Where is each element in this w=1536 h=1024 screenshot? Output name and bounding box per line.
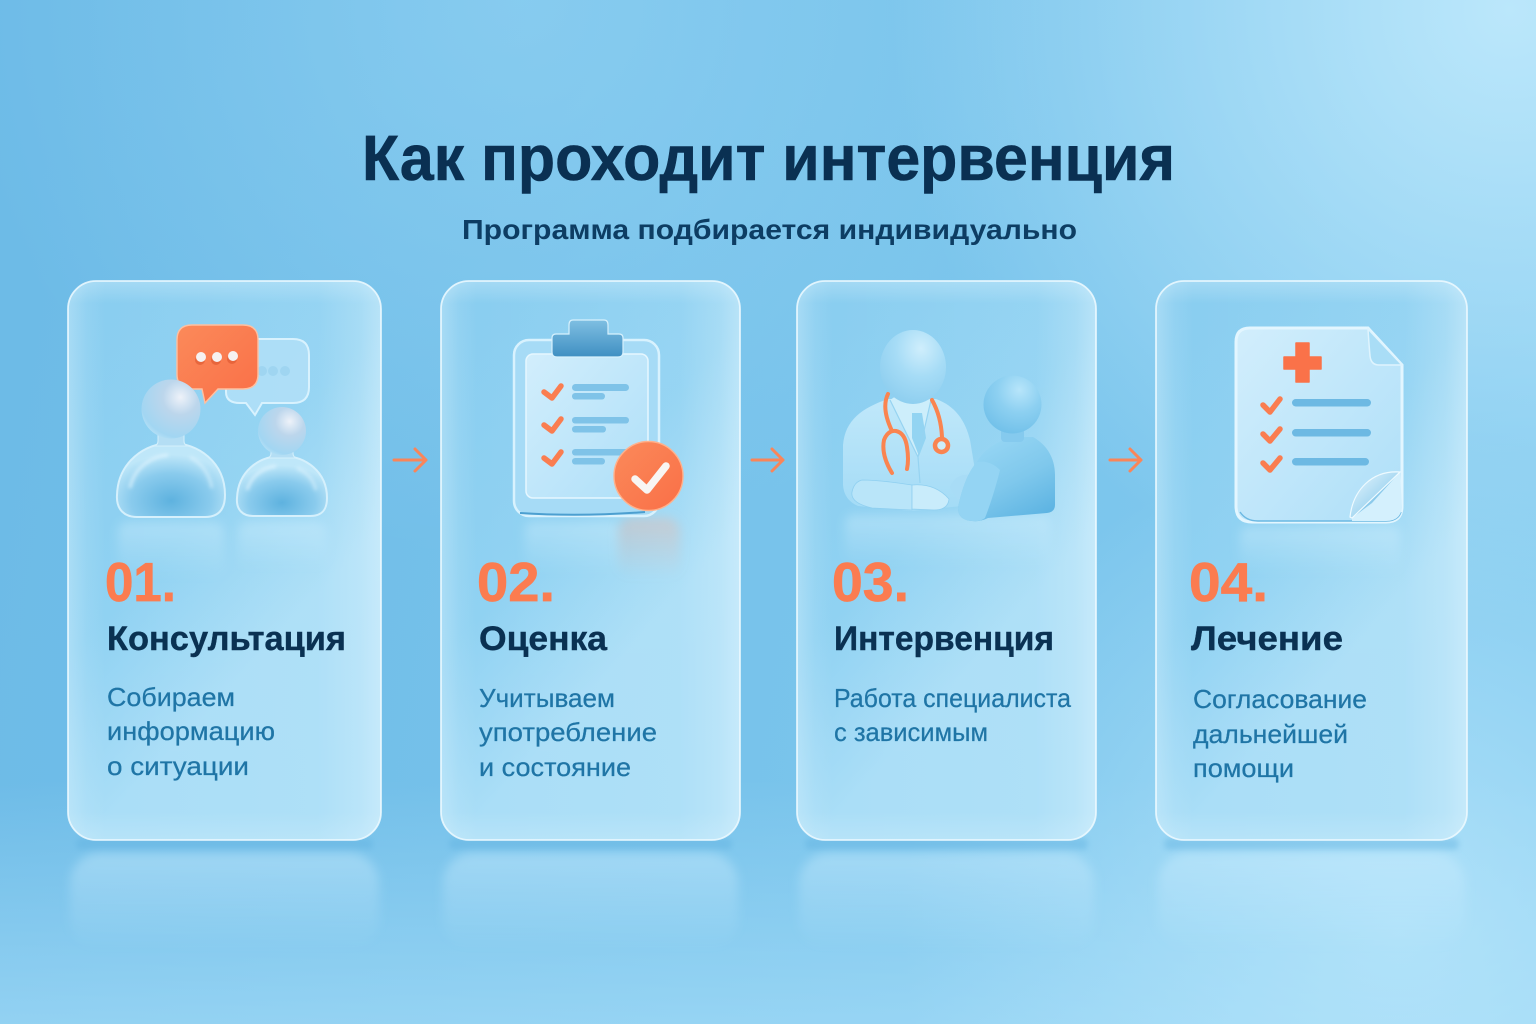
checklist rows	[544, 384, 629, 464]
patient	[958, 376, 1055, 521]
step description: информацию	[107, 716, 275, 746]
step description	[479, 683, 657, 782]
clipboard clip	[552, 320, 623, 357]
step heading: Консультация	[107, 620, 346, 658]
step description: Собираем	[107, 682, 235, 712]
panel: step 3 intervention	[797, 281, 1096, 840]
card shadows and floor reflections	[70, 838, 1465, 948]
step description: Работа специалиста	[834, 683, 1072, 713]
clipboard paper	[526, 354, 648, 498]
doctor	[843, 330, 975, 511]
panel: step 2 assessment	[441, 281, 740, 840]
arrow: step 2 to 3	[752, 449, 783, 471]
clipboard board	[514, 340, 659, 516]
step description: Согласование	[1193, 684, 1367, 714]
person right	[237, 407, 327, 516]
medical cross	[1284, 343, 1321, 382]
step number: 03.	[832, 551, 909, 613]
folded corner	[1368, 329, 1402, 365]
step heading: Лечение	[1191, 620, 1343, 658]
title: Как проходит интервенция	[362, 122, 1175, 194]
orange bubble dots	[195, 351, 238, 365]
icon: doctor and patient	[843, 330, 1055, 565]
step number: 04.	[1189, 551, 1268, 613]
step description: дальнейшей	[1193, 719, 1348, 749]
glass bubble dots	[257, 366, 290, 376]
step description: Учитываем	[479, 683, 615, 713]
step description	[1193, 684, 1367, 783]
step description: помощи	[1193, 753, 1294, 783]
step description: употребление	[479, 717, 657, 747]
step description: и состояние	[479, 752, 631, 782]
arrow: step 1 to 2	[394, 449, 426, 471]
icon: clipboard with checks	[514, 320, 683, 578]
icon: medical document	[1236, 328, 1402, 572]
person left	[117, 380, 225, 517]
step description	[834, 683, 1072, 747]
step description: с зависимым	[834, 717, 988, 747]
subtitle: Программа подбирается индивидуально	[462, 214, 1077, 245]
step heading: Интервенция	[834, 620, 1054, 658]
stethoscope	[883, 394, 948, 473]
check badge	[614, 442, 683, 510]
panel: step 4 treatment	[1156, 281, 1467, 840]
panel: step 1 consultation	[68, 281, 381, 840]
orange speech bubble	[177, 325, 258, 403]
glass speech bubble	[226, 339, 309, 415]
step heading: Оценка	[479, 620, 608, 658]
step number: 01.	[105, 551, 176, 613]
icon: two people talking	[117, 325, 327, 577]
step description: о ситуации	[107, 751, 249, 781]
checklist rows	[1263, 399, 1371, 470]
document page	[1236, 328, 1402, 522]
arrow: step 3 to 4	[1110, 449, 1141, 471]
step number: 02.	[477, 551, 555, 613]
step description	[107, 682, 275, 781]
page curl	[1350, 472, 1402, 521]
